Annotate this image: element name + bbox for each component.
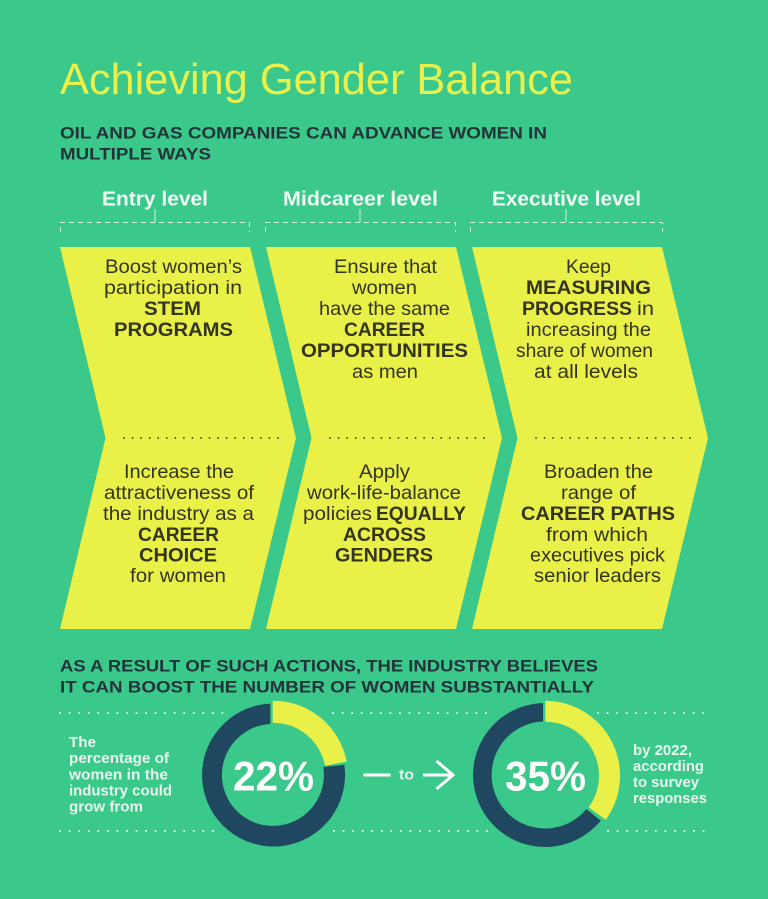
right caption: according	[633, 758, 704, 775]
subheading: OIL AND GAS COMPANIES CAN ADVANCE WOMEN IN	[60, 124, 547, 142]
panel: midcareer level chevron: GENDERS	[335, 544, 433, 566]
panel: executive level chevron: share of women	[516, 340, 653, 362]
results heading: AS A RESULT OF SUCH ACTIONS, THE INDUSTRY BELIEVES	[60, 656, 598, 676]
panel: midcareer level chevron: OPPORTUNITIES	[301, 340, 468, 362]
panel: entry level chevron: the industry as a	[103, 503, 254, 525]
right caption: by 2022,	[633, 742, 692, 759]
panel: executive level chevron: Keep	[566, 256, 611, 278]
panel: entry level chevron: for women	[130, 565, 226, 587]
column header: midcareer level: Midcareer level	[283, 188, 438, 210]
panel: entry level chevron: participation in	[104, 277, 242, 299]
donut chart: 35%	[473, 701, 620, 847]
panel: midcareer level chevron: ACROSS	[343, 524, 426, 546]
panel: midcareer level chevron: Ensure that	[334, 256, 438, 278]
results heading	[60, 656, 598, 696]
panel: entry level chevron: attractiveness of	[104, 482, 255, 504]
panel: executive level chevron: Broaden the	[544, 461, 653, 483]
panel: midcareer level chevron: CAREER	[344, 319, 425, 341]
column header: entry level	[60, 188, 250, 232]
panel: executive level chevron: CAREER PATHS	[521, 503, 675, 525]
left caption: percentage of	[69, 750, 170, 767]
donut chart: 22%: 22%	[233, 752, 314, 800]
left caption: women in the	[68, 766, 168, 784]
results heading: IT CAN BOOST THE NUMBER OF WOMEN SUBSTANTIALLY	[60, 678, 595, 696]
panel: midcareer level chevron: women	[351, 277, 417, 299]
panel: midcareer level chevron: have the same	[319, 298, 450, 320]
panel: executive level chevron: from which	[546, 524, 648, 546]
left caption: The	[69, 734, 96, 751]
panel: midcareer level chevron: as men	[352, 361, 418, 383]
subheading	[60, 124, 547, 164]
panel: executive level chevron: executives pick	[530, 544, 665, 566]
panel: executive level chevron: PROGRESS	[522, 298, 632, 320]
left caption: grow from	[69, 798, 143, 816]
left caption	[68, 734, 172, 816]
right caption	[633, 742, 707, 807]
panel: entry level chevron: Increase the	[124, 461, 234, 483]
column header: executive level: Executive level	[492, 188, 641, 210]
panel: entry level chevron	[60, 247, 296, 629]
panel: entry level chevron: STEM	[144, 298, 201, 320]
panel: entry level chevron: CHOICE	[139, 544, 217, 566]
right caption: responses	[633, 790, 707, 807]
panel: midcareer level chevron: Apply	[359, 461, 410, 483]
panel: executive level chevron: in	[637, 298, 654, 320]
panel: executive level chevron: range of	[561, 482, 637, 504]
donut chart: 22%	[202, 701, 347, 847]
subheading: MULTIPLE WAYS	[60, 144, 211, 164]
arrow: to	[364, 761, 453, 789]
panel: executive level chevron: MEASURING	[526, 277, 651, 299]
right caption: to survey	[633, 774, 700, 791]
panel: entry level chevron: Boost women’s	[105, 256, 242, 278]
panel: executive level chevron: senior leaders	[534, 565, 661, 587]
column header: midcareer level	[266, 188, 456, 232]
panel: midcareer level chevron: work-life-balance	[306, 482, 461, 504]
column header: executive level	[470, 188, 662, 232]
panel: executive level chevron	[472, 247, 708, 629]
arrow: to: to	[399, 768, 414, 784]
panel: entry level chevron: PROGRAMS	[114, 319, 233, 341]
panel: midcareer level chevron: policies	[303, 503, 372, 525]
panel: executive level chevron: at all levels	[534, 361, 638, 383]
panel: midcareer level chevron	[266, 247, 502, 629]
title: Achieving Gender Balance	[60, 55, 573, 104]
panel: executive level chevron: increasing the	[526, 319, 651, 341]
donut chart: 35%: 35%	[505, 752, 586, 800]
panel: entry level chevron: CAREER	[138, 524, 219, 546]
column header: entry level: Entry level	[102, 188, 208, 210]
panel: midcareer level chevron: EQUALLY	[376, 503, 466, 525]
left caption: industry could	[69, 782, 172, 800]
